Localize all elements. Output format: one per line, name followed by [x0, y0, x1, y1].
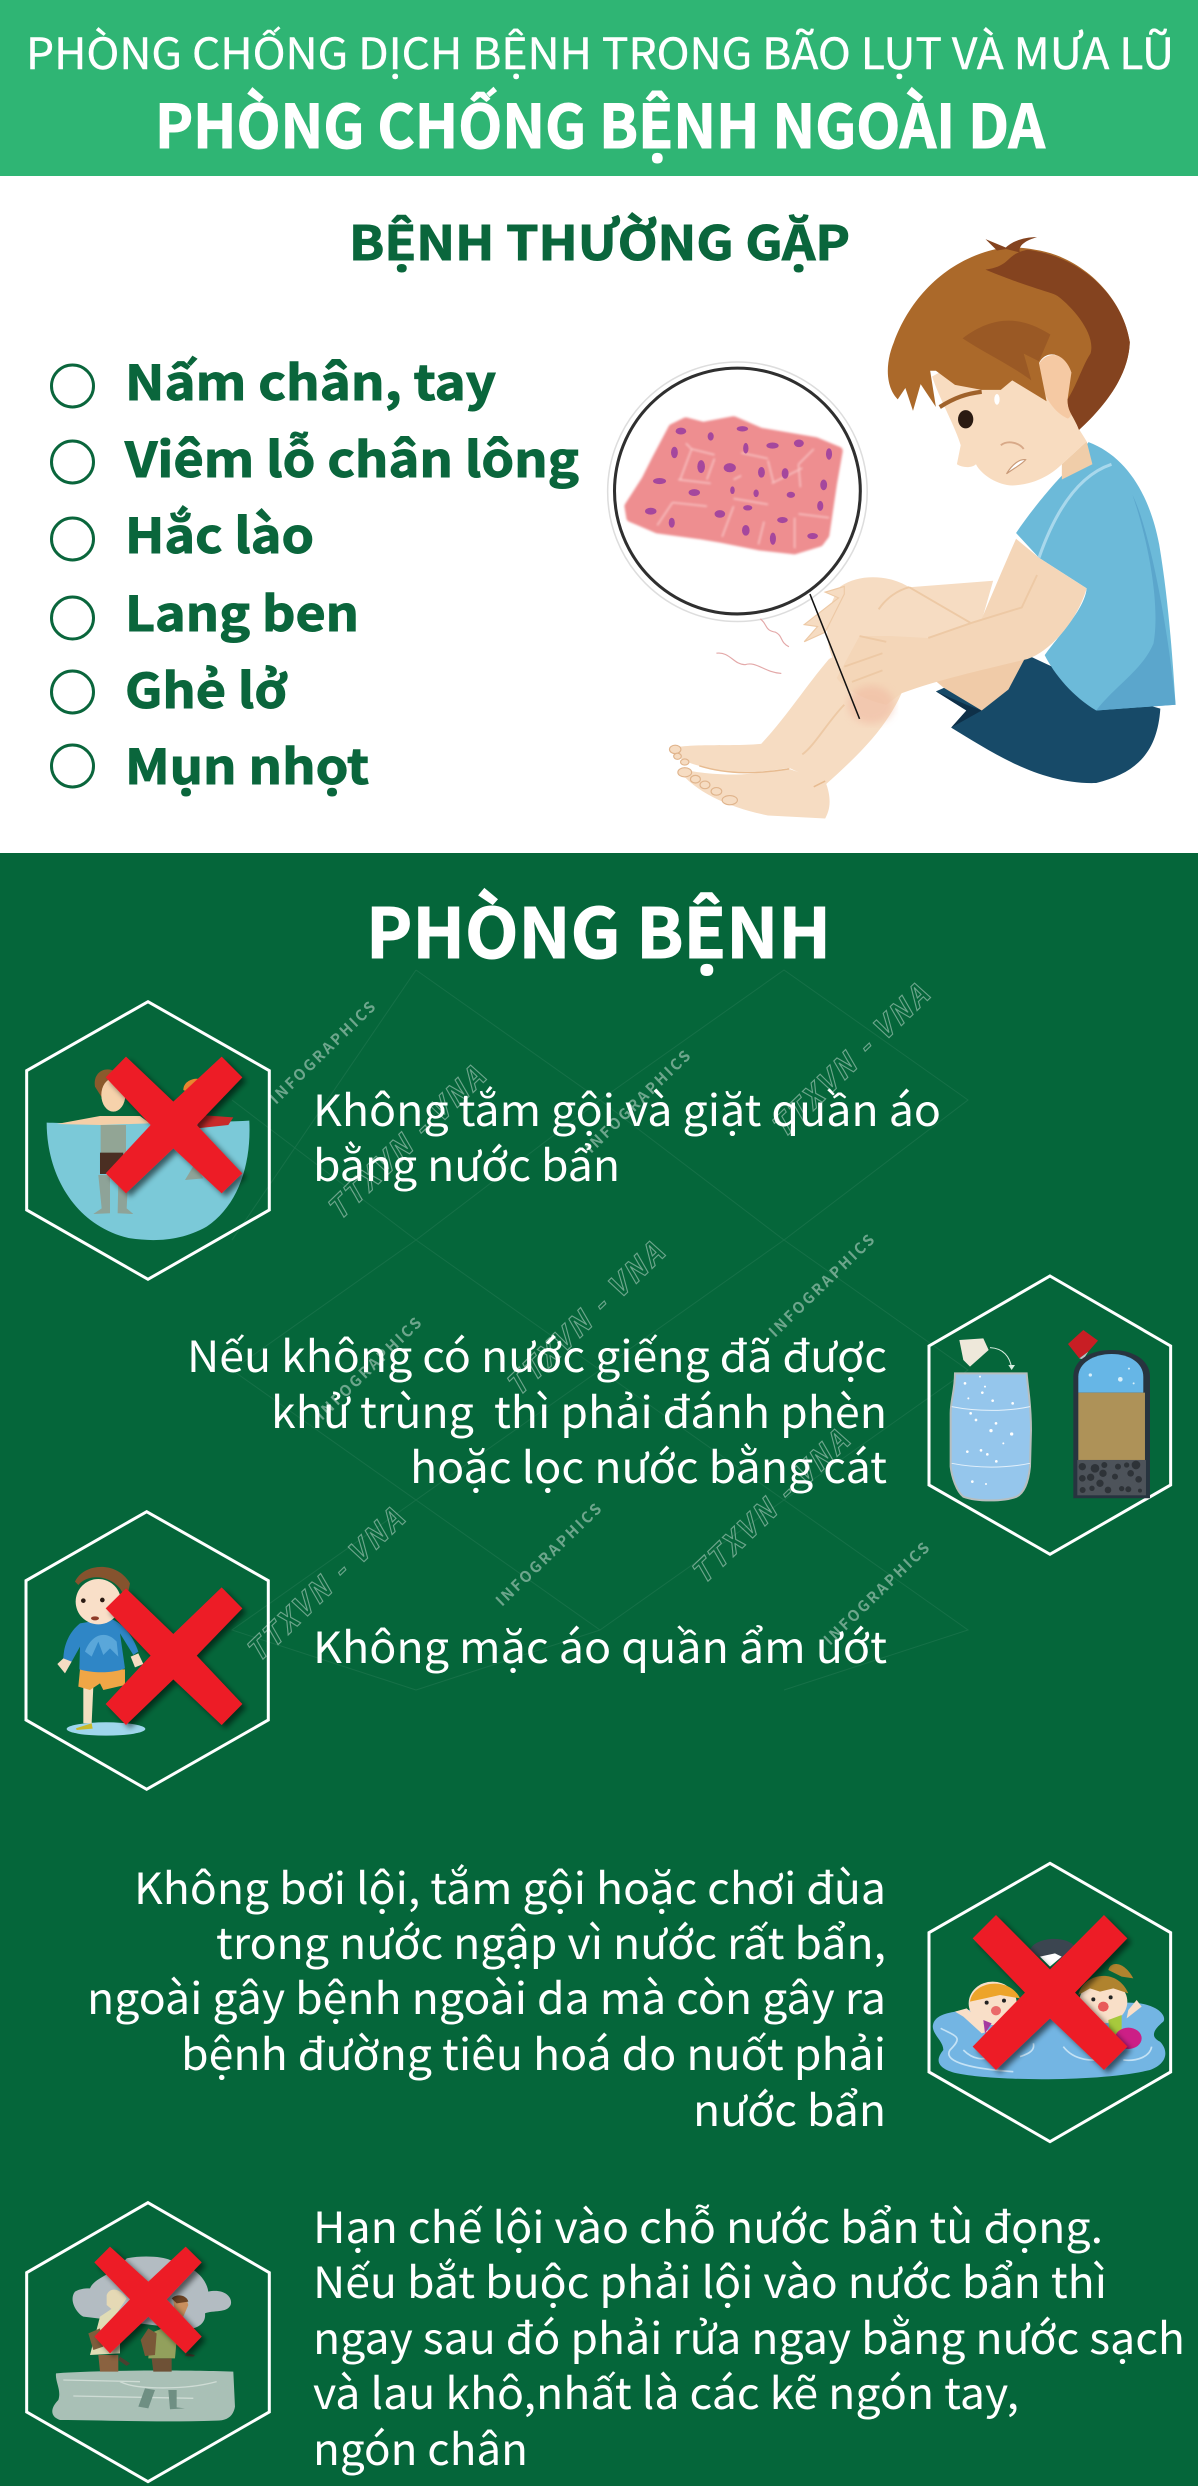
text: avoid dirty stagnant water: và lau khô,nhất là các kẽ ngón tay, — [313, 2360, 1019, 2422]
list item: Hắc lào: Hắc lào — [125, 497, 314, 567]
watermark texts: TTXVN - VNA — [495, 1232, 672, 1404]
text: avoid dirty stagnant water: Hạn chế lội vào chỗ nước bẩn tù đọng. — [313, 2194, 1103, 2256]
list item: Ghẻ lở — [52, 652, 288, 722]
watermark grid — [232, 970, 968, 1690]
text: no swimming in flood water: Không bơi lội, tắm gội hoặc chơi đùa — [134, 1855, 886, 1917]
main title: PHÒNG CHỐNG BỆNH NGOÀI DA — [155, 79, 1046, 166]
watermark texts: INFOGRAPHICS — [580, 1045, 695, 1158]
illustration: boy with skin rash and magnifier — [608, 237, 1176, 819]
icon: alum and sand filter — [929, 1276, 1171, 1554]
list item: Ghẻ lở: Ghẻ lở — [125, 652, 288, 722]
text: no swimming in flood water: nước bẩn — [693, 2077, 886, 2139]
watermark texts: INFOGRAPHICS — [764, 1229, 879, 1342]
watermark texts: INFOGRAPHICS — [265, 996, 380, 1109]
text: no bathing: bằng nước bẩn — [313, 1132, 620, 1194]
text: water treatment — [187, 1323, 887, 1496]
text: water treatment: khử trùng thì phải đánh phèn — [271, 1379, 887, 1441]
text: avoid dirty stagnant water: ngón chân — [313, 2416, 528, 2478]
watermark texts: INFOGRAPHICS — [311, 1312, 426, 1425]
heading: common diseases: BỆNH THƯỜNG GẶP — [349, 205, 850, 274]
header band — [0, 0, 1198, 176]
text: no swimming in flood water: bệnh đường tiêu hoá do nuốt phải — [181, 2021, 886, 2083]
watermark texts: TTXVN - VNA — [235, 1498, 412, 1670]
watermark texts — [235, 974, 937, 1670]
list item: Hắc lào — [52, 497, 314, 567]
text: avoid dirty stagnant water: ngay sau đó phải rửa ngay bằng nước sạch — [313, 2305, 1185, 2367]
text: no bathing — [313, 1077, 941, 1194]
text: avoid dirty stagnant water: Nếu bắt buộc phải lội vào nước bẩn thì — [313, 2249, 1107, 2311]
list item: Nấm chân, tay: Nấm chân, tay — [125, 344, 496, 414]
disease list — [52, 344, 579, 798]
text: water treatment: Nếu không có nước giếng đã được — [187, 1323, 887, 1385]
icon: no bathing in dirty water — [27, 1002, 269, 1279]
list item: Lang ben: Lang ben — [125, 575, 359, 645]
text: water treatment: hoặc lọc nước bằng cát — [410, 1434, 887, 1496]
header subtitle: PHÒNG CHỐNG DỊCH BỆNH TRONG BÃO LỤT VÀ MƯA LŨ — [26, 20, 1174, 82]
heading: prevention: PHÒNG BỆNH — [366, 878, 831, 978]
list item: Mụn nhọt: Mụn nhọt — [125, 728, 369, 798]
watermark texts: TTXVN - VNA — [316, 1056, 493, 1228]
icon: wading in flood water — [27, 2203, 269, 2482]
icon: children swimming — [929, 1863, 1171, 2142]
text: no swimming in flood water — [87, 1855, 886, 2139]
text: no bathing: Không tắm gội và giặt quần áo — [313, 1077, 941, 1139]
watermark texts: TTXVN - VNA — [680, 1420, 857, 1592]
watermark texts: INFOGRAPHICS — [819, 1537, 934, 1650]
text: avoid dirty stagnant water — [313, 2194, 1185, 2478]
text: no swimming in flood water: trong nước ngập vì nước rất bẩn, — [216, 1910, 886, 1972]
icon: no damp clothes — [26, 1512, 268, 1789]
watermark texts: INFOGRAPHICS — [491, 1498, 606, 1611]
list item: Viêm lỗ chân lông: Viêm lỗ chân lông — [124, 421, 579, 491]
prevention panel — [0, 853, 1198, 2486]
watermark texts: TTXVN - VNA — [760, 974, 937, 1146]
text: no swimming in flood water: ngoài gây bệnh ngoài da mà còn gây ra — [87, 1965, 886, 2027]
text: no damp clothes: Không mặc áo quần ẩm ướt — [313, 1614, 887, 1676]
